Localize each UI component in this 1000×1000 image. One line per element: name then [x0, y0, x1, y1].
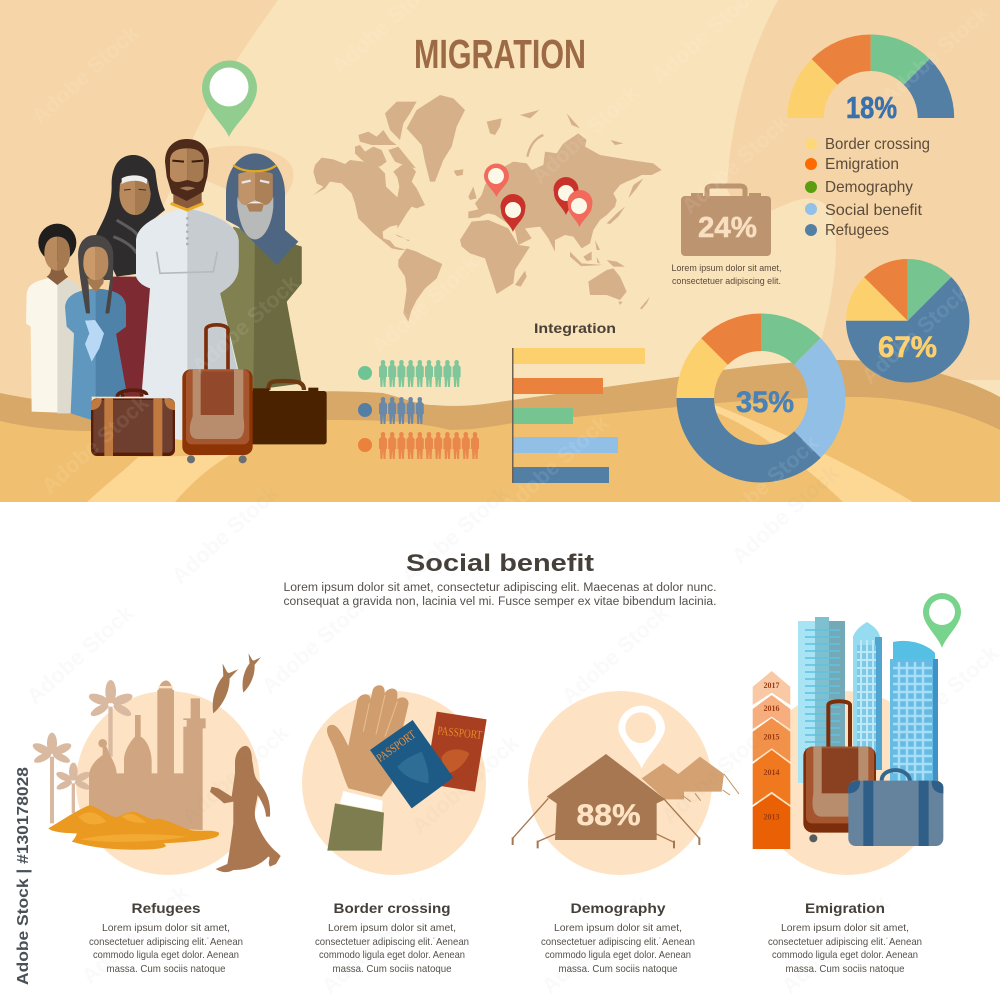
watermark: Adobe Stock [407, 730, 524, 839]
legend: Refugees [825, 222, 889, 239]
stock credit: Adobe Stock | #130178028 [15, 767, 32, 985]
caption: Border crossing: commodo ligula eget dolor. Aenean [319, 949, 465, 961]
map pin: Central Asia [554, 177, 578, 215]
watermark: Adobe Stock [537, 890, 654, 999]
shirt cuff [340, 791, 383, 812]
briefcase caption: consectetuer adipiscing elit. [672, 276, 781, 287]
sleeve [327, 803, 384, 851]
briefcase caption: Lorem ipsum dolor sit amet, [672, 263, 782, 274]
timeline arrows [753, 671, 790, 849]
watermark: Adobe Stock [77, 880, 194, 989]
map: Eurasia, Africa, Australia [454, 110, 662, 309]
map pin: Europe [484, 164, 509, 197]
caption: Refugees: Refugees [132, 900, 201, 916]
rolling suitcase [182, 325, 253, 463]
skyscraper middle [853, 622, 882, 770]
caption: Border crossing: Lorem ipsum dolor sit amet, [328, 922, 456, 934]
half-donut gauge 18% [787, 34, 954, 125]
top panel: desert background [0, 0, 1000, 502]
migrant family [26, 139, 302, 443]
watermark: Adobe Stock [317, 890, 434, 999]
panel: emigration illustration [753, 593, 961, 875]
heading: Social benefit: Social benefit [406, 550, 594, 577]
legend: Emigration [825, 156, 899, 173]
donut chart 35%: 35% [736, 386, 794, 419]
watermark: Adobe Stock [657, 720, 774, 829]
watermark: Adobe Stock [707, 430, 824, 539]
elder man [220, 153, 302, 390]
panel: demography illustration [513, 691, 739, 875]
panel: border crossing illustration [302, 685, 487, 875]
legend: Demography [825, 179, 913, 196]
woman in hijab [96, 155, 165, 397]
caption: Refugees: massa. Cum sociis natoque [106, 963, 226, 975]
caption: Border crossing: Border crossing [334, 900, 450, 916]
briefcase stat 24% [681, 186, 771, 256]
watermark: Adobe Stock [187, 270, 304, 379]
timeline arrows: 2013 [764, 812, 780, 822]
green people row [358, 360, 461, 387]
caption: Demography: massa. Cum sociis natoque [558, 963, 678, 975]
caption: Refugees: consectetuer adipiscing elit.˙Aenean [89, 936, 243, 948]
pie chart 67% [846, 259, 969, 382]
watermark: Adobe Stock [887, 640, 1000, 749]
sand dunes [48, 805, 219, 850]
half-donut gauge 18%: 18% [846, 90, 897, 125]
large tent [547, 754, 665, 840]
timeline arrows: 2015 [764, 732, 780, 742]
watermark: Adobe Stock [367, 250, 484, 359]
girl [65, 235, 126, 420]
intro text [284, 582, 716, 608]
legend [805, 136, 930, 239]
caption: Refugees [89, 900, 243, 975]
legend: Border crossing [825, 136, 930, 153]
blue suitcase [848, 770, 943, 846]
small tents [642, 757, 739, 802]
panel: demography illustration: 88% [576, 799, 640, 832]
skyscraper left [798, 617, 845, 783]
watermark: Adobe Stock [27, 20, 144, 129]
intro text: Lorem ipsum dolor sit amet, consectetur adipiscing elit. Maecenas at dolor nunc. [284, 582, 716, 594]
fleeing woman silhouette [210, 746, 281, 872]
map pin: Middle East [500, 194, 526, 232]
watermark: Adobe Stock [557, 600, 674, 709]
pie chart 67%: 67% [878, 331, 937, 364]
caption: Demography: Demography [570, 900, 666, 916]
orange people row [358, 432, 479, 459]
mosque silhouette [89, 681, 206, 830]
watermark: Adobe Stock [257, 590, 374, 699]
watermark: Adobe Stock [167, 480, 284, 589]
map pin: China [568, 190, 592, 227]
legend: Social benefit [825, 202, 923, 219]
skyscraper right [890, 641, 938, 784]
black suitcase [250, 381, 327, 444]
caption: Emigration: Lorem ipsum dolor sit amet, [781, 922, 909, 934]
timeline arrows: 2014 [764, 768, 780, 777]
bombs [206, 653, 261, 716]
watermark: Adobe Stock [177, 720, 294, 829]
caption: Demography: commodo ligula eget dolor. Aenean [545, 949, 691, 961]
watermark: Adobe Stock [727, 460, 844, 569]
map: Americas and Greenland [313, 95, 465, 322]
donut chart 35% [676, 314, 845, 482]
palm trees [31, 680, 134, 823]
watermark: Adobe Stock [777, 890, 894, 999]
briefcase caption [672, 263, 782, 287]
caption: Border crossing: massa. Cum sociis natoque [332, 963, 452, 975]
watermark: Adobe Stock [397, 480, 514, 589]
caption: Demography [541, 900, 695, 975]
people icons legend [358, 360, 479, 459]
watermark: Adobe Stock [857, 280, 974, 389]
caption: Emigration: massa. Cum sociis natoque [786, 963, 905, 975]
blue people row [358, 397, 424, 424]
caption: Emigration: Emigration [805, 900, 885, 916]
white location pin [618, 706, 665, 768]
red passport [425, 712, 487, 792]
caption: Emigration: commodo ligula eget dolor. Aenean [772, 949, 918, 961]
title: MIGRATION [414, 31, 586, 77]
caption: Emigration: consectetuer adipiscing elit.˙Aenean [768, 936, 922, 948]
boy [26, 224, 80, 413]
watermark: Adobe Stock [877, 0, 994, 109]
timeline arrows: 2017 [764, 681, 780, 690]
red passport: PASSPORT [437, 723, 483, 742]
watermark: Adobe Stock [677, 110, 794, 219]
man in white robe [136, 139, 239, 443]
rolling suitcase [803, 701, 876, 842]
guy ropes [513, 798, 699, 842]
watermark: Adobe Stock [37, 390, 154, 499]
caption: Refugees: commodo ligula eget dolor. Aenean [93, 949, 239, 961]
caption: Demography: consectetuer adipiscing elit.˙Aenean [541, 936, 695, 948]
world map [313, 95, 662, 322]
watermark: Adobe Stock [527, 80, 644, 189]
large green location pin [202, 60, 257, 137]
timeline arrows: 2016 [764, 704, 780, 713]
watermark: Adobe Stock [22, 600, 139, 709]
panel: refugees illustration [31, 653, 281, 875]
blue passport: PASSPORT [374, 727, 419, 765]
watermark: Adobe Stock [497, 410, 614, 519]
caption: Refugees: Lorem ipsum dolor sit amet, [102, 922, 230, 934]
blue passport [370, 720, 453, 808]
caption: Border crossing: consectetuer adipiscing elit.˙Aenean [315, 936, 469, 948]
intro text: consequat a gravida non, lacinia vel mi. Fusce semper ex vitae bibendum lacinia. [284, 596, 716, 608]
brown suitcase [91, 390, 175, 456]
heading: Integration: Integration [534, 320, 616, 336]
caption: Border crossing [315, 900, 469, 975]
caption: Emigration [768, 900, 922, 975]
bar chart: integration [512, 348, 645, 483]
open hand [327, 685, 409, 797]
briefcase stat 24%: 24% [698, 212, 757, 244]
caption: Demography: Lorem ipsum dolor sit amet, [554, 922, 682, 934]
green location pin [923, 593, 961, 648]
